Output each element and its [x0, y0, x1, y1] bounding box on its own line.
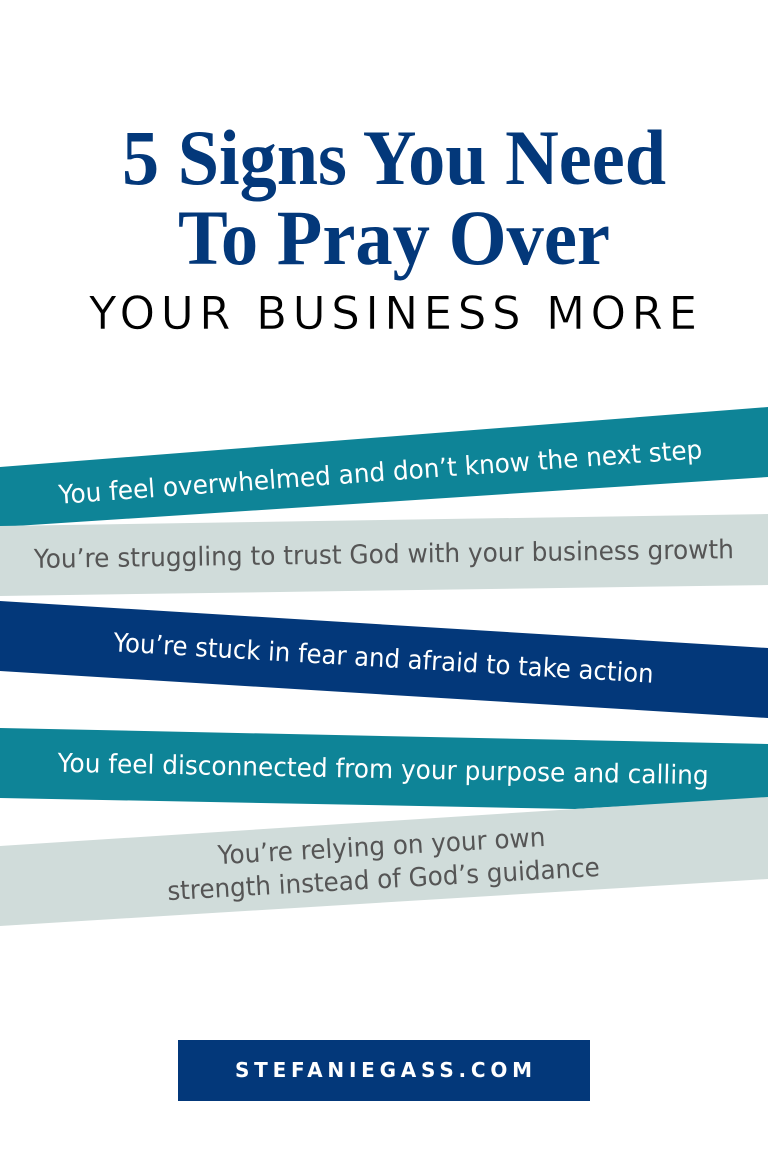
banner: disconnected: [0, 728, 768, 809]
title: [122, 114, 666, 281]
title: 5 Signs You Need: [122, 114, 666, 201]
banner: strength: strength instead of God’s guidance: [167, 853, 601, 907]
banner: trust: You’re struggling to trust God with your business growth: [33, 535, 734, 575]
banner: fear: [0, 601, 768, 718]
banner: fear: You’re stuck in fear and afraid to take action: [112, 628, 654, 690]
banner: trust: [0, 514, 768, 596]
banner: overwhelmed: You feel overwhelmed and don’t know the next step: [57, 435, 703, 511]
banner: disconnected: You feel disconnected from your purpose and calling: [56, 749, 709, 791]
website button: STEFANIEGASS.COM: [235, 1058, 532, 1082]
banner: strength: [0, 797, 768, 926]
banner: strength: You’re relying on your own: [216, 823, 546, 871]
title: To Pray Over: [178, 194, 610, 281]
banner: overwhelmed: [0, 407, 768, 527]
subtitle: YOUR BUSINESS MORE: [88, 287, 697, 340]
website button: [178, 1040, 590, 1101]
